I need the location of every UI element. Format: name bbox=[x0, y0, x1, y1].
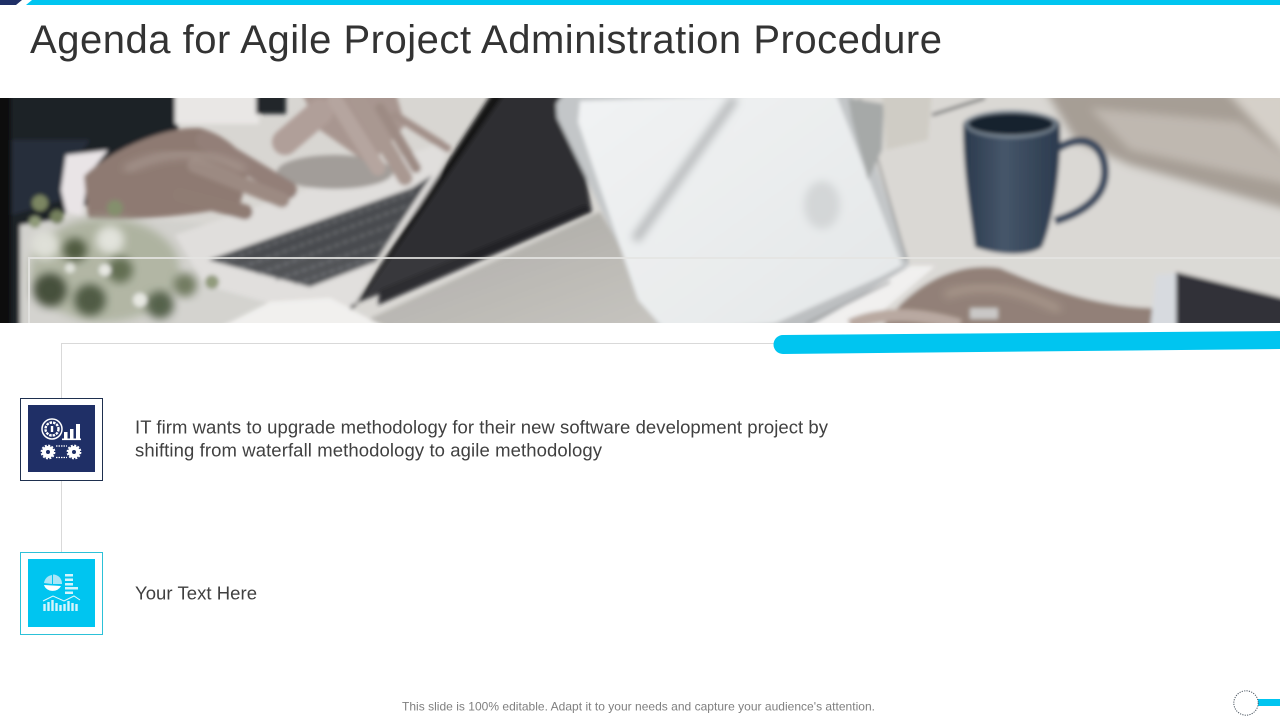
laptop 1 deck bbox=[175, 140, 450, 312]
photo frame overlay bbox=[29, 258, 1280, 324]
book blurred bbox=[1045, 90, 1280, 210]
right hand bbox=[850, 267, 1152, 330]
laptop 2 screen bbox=[578, 92, 902, 330]
items behind laptop bbox=[848, 98, 884, 180]
white desk under plant bbox=[16, 216, 64, 323]
agenda item 1 text: IT firm wants to upgrade methodology for their new software development project by bbox=[135, 416, 829, 438]
laptop 2 hinge bbox=[776, 277, 887, 323]
agenda item 1 text: shifting from waterfall methodology to agile methodology bbox=[135, 440, 603, 460]
keyboard bbox=[208, 175, 432, 287]
upper hand bbox=[285, 90, 447, 178]
mug body bbox=[963, 111, 1060, 254]
icon: bars bbox=[62, 424, 81, 440]
paper bbox=[226, 298, 382, 323]
icon: list bars bbox=[65, 574, 78, 594]
dark suit left bbox=[0, 90, 178, 330]
desk right bbox=[860, 90, 1280, 330]
icon: pie bbox=[44, 574, 62, 591]
page marker: dotted circle with cyan tab bbox=[1234, 691, 1280, 715]
connector line bbox=[62, 344, 780, 552]
plant bbox=[29, 195, 219, 322]
top accent bar bbox=[0, 0, 1280, 5]
cyan accent bar bbox=[774, 331, 1280, 354]
laptop 2 keyboard deck bbox=[812, 265, 932, 323]
agenda item 2 icon: pie chart, bars and trend line bbox=[20, 552, 102, 634]
mug handle bbox=[1055, 141, 1105, 221]
desk mid grey bbox=[345, 212, 670, 330]
title: Agenda for Agile Project Administration Procedure bbox=[30, 18, 942, 62]
shadow under upper hand bbox=[277, 155, 393, 189]
icon: gears bbox=[42, 446, 80, 458]
shirt cuff left bbox=[61, 150, 108, 216]
right cuff and sleeve bbox=[1148, 275, 1174, 323]
icon: gauge bbox=[42, 419, 62, 439]
agenda item 2 text: Your Text Here bbox=[135, 582, 257, 604]
left hand bbox=[84, 128, 288, 219]
dark tablet bbox=[350, 90, 592, 312]
icon: trend line and columns bbox=[43, 596, 80, 611]
agenda item 1 icon: gauge, bars and gears bbox=[20, 398, 102, 480]
laptop 2 silver frame bbox=[552, 98, 910, 268]
footer note: This slide is 100% editable. Adapt it to your needs and capture your audience's attention. bbox=[402, 700, 875, 714]
photo banner: hands on laptops and a mug bbox=[0, 90, 1280, 330]
agenda item 1 text bbox=[135, 416, 829, 460]
